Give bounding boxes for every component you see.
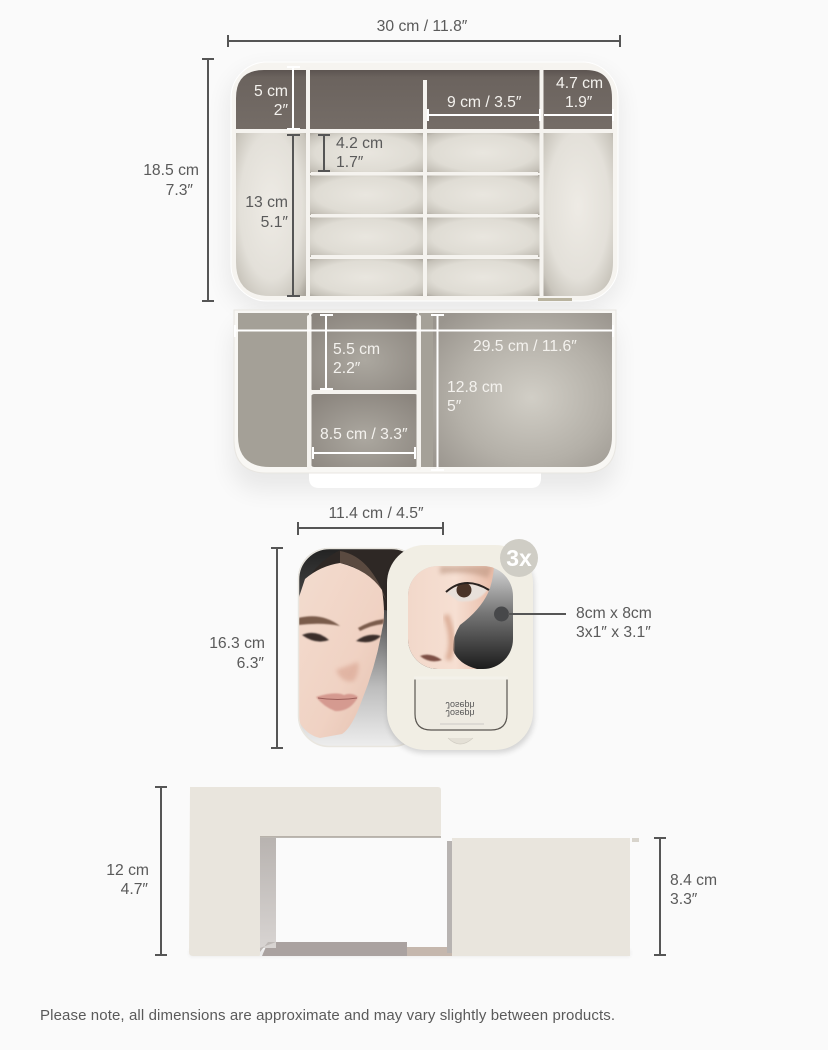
white dimension: 5 cm: [254, 67, 300, 129]
white dimension: 9 cm: 9 cm / 3.5″: [447, 94, 522, 111]
right brow: [358, 619, 384, 631]
logo: Joseph: [445, 708, 475, 718]
white dividers: [235, 67, 614, 297]
logo: [445, 700, 475, 718]
right eye: [356, 635, 381, 642]
pocket flap: [414, 678, 508, 730]
dimension: 4.2 cm: 4.2 cm: [336, 135, 383, 152]
white dimension: 29.5 cm: [235, 325, 613, 355]
lid right compartment: [433, 313, 612, 467]
dimension: mirror height 16.3 cm: 6.3″: [237, 655, 264, 672]
inner side wall left: [260, 838, 276, 948]
lid strip beside middle: [419, 313, 433, 467]
white dimension: 8.5 cm: [313, 426, 415, 459]
eye iris: [456, 582, 472, 598]
magnifying window: [408, 566, 513, 669]
dimension: height 8.4 cm: [654, 838, 717, 955]
lid shadow: [232, 320, 616, 490]
lid body: [234, 310, 616, 473]
dimension: overall depth 18.5 cm: 18.5 cm: [143, 162, 199, 179]
left long compartment: [236, 133, 306, 296]
lid mid compartments: [311, 313, 418, 391]
nostril: [420, 655, 442, 661]
dimension: 13 cm: 5.1″: [261, 214, 288, 231]
eye white: [447, 584, 488, 602]
left eye: [302, 633, 329, 642]
dimension: mirror width 11.4 cm: 11.4 cm / 4.5″: [328, 505, 424, 522]
eye lash: [446, 583, 489, 592]
small hinge: [632, 838, 639, 842]
hinge strip: [538, 298, 572, 301]
lid left compartment: [238, 313, 309, 467]
dimension: 4.2 cm: [318, 135, 383, 171]
dimension: overall depth 18.5 cm: 7.3″: [166, 182, 193, 199]
white dimension: 8.5 cm: 8.5 cm / 3.3″: [320, 426, 408, 443]
eye brow shadow: [440, 566, 492, 578]
panel: side view of open case: [189, 787, 639, 956]
white dimension: 12.8 cm: [431, 315, 503, 470]
tray body: [231, 62, 618, 301]
3x badge: 3x: [506, 545, 532, 571]
dimension: height 12 cm: [106, 787, 167, 955]
infographic canvas: [41, 20, 716, 1023]
panel: upper tray top view: [228, 62, 620, 310]
inner side wall right: [447, 841, 452, 953]
dimension: mirror height 16.3 cm: [209, 548, 283, 748]
white dimension: 5.5 cm: 5.5 cm: [333, 341, 380, 358]
dimension: height 12 cm: 12 cm: [106, 862, 149, 879]
dimension: height 12 cm: 4.7″: [121, 881, 148, 898]
white dimension: 9 cm: [428, 94, 540, 121]
panel: compact mirror photo: [298, 539, 538, 753]
organiser cells: [309, 133, 540, 296]
3x badge: [500, 539, 538, 577]
left brow: [298, 616, 340, 626]
right box body: [452, 838, 630, 956]
upper dark compartments: [236, 70, 612, 131]
white dimension: 4.7 cm: 1.9″: [565, 94, 593, 111]
back mirror rim: [298, 548, 422, 746]
white dimension: 4.7 cm: [544, 75, 613, 121]
callout: mirror size 8cm x 8cm: [508, 605, 652, 641]
hair: [312, 550, 404, 610]
back mirror: [298, 548, 405, 746]
white dimension: 5 cm: 5 cm: [254, 83, 288, 100]
face skin: [298, 563, 384, 738]
callout: mirror size 8cm x 8cm: 8cm x 8cm: [576, 605, 652, 622]
white dimension: 4.7 cm: 4.7 cm: [556, 75, 603, 92]
lid handle: [309, 470, 541, 488]
dimension: mirror width 11.4 cm: [298, 505, 443, 535]
dimension: 13 cm: 13 cm: [245, 194, 288, 211]
front case: [387, 545, 533, 750]
front case shadow: [388, 550, 534, 753]
floor of tray: [262, 942, 407, 956]
tray shadow: [228, 70, 620, 310]
dimension: overall width 30 cm: [228, 18, 620, 47]
right long compartment: [543, 133, 613, 296]
ground shadow: [190, 950, 630, 956]
white dimension: 12.8 cm: 12.8 cm: [447, 379, 503, 396]
dimension: height 8.4 cm: 3.3″: [670, 891, 698, 908]
white dimension: 12.8 cm: 5″: [447, 398, 462, 415]
dimension: 13 cm: [245, 135, 300, 296]
footnote: Please note, all dimensions are approximate and may vary slightly between products.: [40, 1007, 615, 1024]
lips: [316, 693, 358, 711]
logo: Joseph: [445, 700, 475, 710]
dimension: 4.2 cm: 1.7″: [336, 154, 364, 171]
left L-shaped body: [189, 787, 441, 956]
callout: mirror size 8cm x 8cm: 3x1″ x 3.1″: [576, 624, 651, 641]
nose shade: [446, 615, 452, 660]
dimension: overall width 30 cm: 30 cm / 11.8″: [377, 18, 468, 35]
white dimension: 29.5 cm: 29.5 cm / 11.6″: [473, 338, 577, 355]
finger notch: [448, 738, 473, 744]
nose shadow: [336, 662, 358, 682]
lid dividers: [307, 315, 421, 470]
dimension: mirror height 16.3 cm: 16.3 cm: [209, 635, 265, 652]
white dimension: 5.5 cm: 2.2″: [333, 360, 361, 377]
white dimension: 5 cm: 2″: [274, 102, 288, 119]
panel: lid tray top view: [232, 310, 616, 490]
dimension: overall depth 18.5 cm: [143, 59, 214, 301]
white dimension: 5.5 cm: [320, 315, 380, 389]
dimension: height 8.4 cm: 8.4 cm: [670, 872, 717, 889]
measure marker dot: [494, 606, 509, 622]
